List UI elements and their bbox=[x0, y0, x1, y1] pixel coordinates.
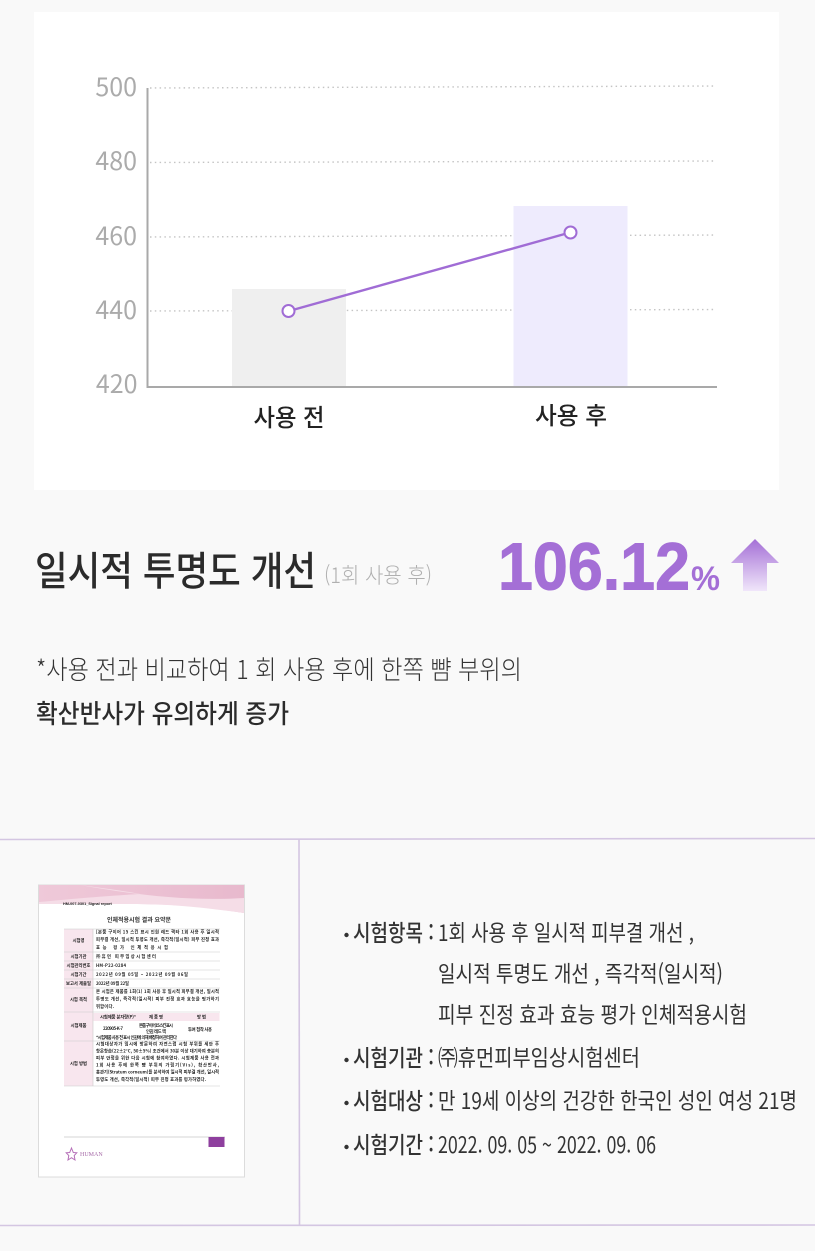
report table: 투명도 개선, 즉각적(일시적) 피부 진정 효과를 평가하였다. bbox=[96, 1076, 207, 1083]
panel: chart background bbox=[34, 12, 779, 490]
test details list bbox=[344, 914, 797, 1160]
item: test items: 시험항목 : bbox=[353, 914, 434, 948]
report table: 효능 평가 인체적용시험 bbox=[96, 944, 168, 951]
y axis labels: 500 bbox=[95, 68, 137, 104]
test report document bbox=[38, 885, 244, 1177]
report table: 피부 안정을 위한 다음 시험에 참여하였다. 시험제품 사용 전과 bbox=[96, 1054, 219, 1062]
report table: HM-P22-0284 bbox=[96, 963, 126, 969]
report table: 시험제품 분자량(P)* bbox=[100, 1014, 136, 1020]
report table: 홍관기(Stratum corneum)를 분석하여 일시적 피부결 개선, 일시적 bbox=[96, 1068, 219, 1076]
report logo: HUMAN bbox=[80, 1152, 103, 1158]
report footer bbox=[64, 1136, 225, 1138]
report table: 2022년 09월 22일 bbox=[96, 980, 129, 987]
description line 2: 확산반사가 유의하게 증가 bbox=[36, 694, 289, 731]
item: test period: 2022. 09. 05 ~ 2022. 09. 06 bbox=[438, 1128, 656, 1160]
report code: HM-007-0301_Signal report bbox=[63, 902, 112, 906]
report title: 인체적용시험 결과 요약문 bbox=[107, 915, 172, 924]
report table: 시험관리번호 bbox=[67, 962, 90, 969]
bar: before use bbox=[232, 289, 346, 387]
report table: 시험기관 bbox=[71, 953, 86, 960]
item: test items bbox=[344, 914, 747, 1030]
item: test subjects: 시험대상 : bbox=[353, 1082, 434, 1116]
report table bbox=[64, 928, 220, 1086]
y axis labels: 480 bbox=[95, 142, 137, 178]
result value: % bbox=[691, 560, 720, 598]
report table: 인원 레드 핵 bbox=[146, 1028, 166, 1035]
report table: *시험제품 사용 전 표시 인원에 의해 배정하여 관리한다 bbox=[96, 1034, 177, 1041]
x label: after use: 사용 후 bbox=[535, 396, 607, 431]
result value: 106.12 bbox=[498, 530, 690, 604]
report table: 위함이다. bbox=[96, 1003, 115, 1010]
axes bbox=[148, 88, 716, 387]
report table: 본품 구이어 15 스킨 표시 bbox=[139, 1022, 173, 1029]
report table: 시험 방법 bbox=[70, 1060, 87, 1067]
trend line with markers bbox=[282, 226, 576, 317]
panel: test info frame bbox=[0, 838, 815, 1226]
grid lines bbox=[150, 86, 716, 311]
report table: [본품 구이어 15 스킨 표시 인원 레드 핵타 1회 사용 후 일시적 bbox=[96, 928, 219, 936]
report table: 항온항습(22±2°C, 50±5%) 조건에서 30분 이상 대기하여 충분히 bbox=[96, 1048, 219, 1054]
y axis labels: 440 bbox=[95, 291, 137, 327]
report table: ㈜휴먼 피부임상시험센터 bbox=[96, 953, 156, 960]
bar and line chart bbox=[95, 68, 716, 433]
bar: after use bbox=[514, 206, 628, 386]
icon: up arrow bbox=[731, 539, 779, 591]
x label: before use: 사용 전 bbox=[254, 398, 324, 433]
item: test institution bbox=[344, 1039, 640, 1073]
y axis labels: 420 bbox=[96, 365, 138, 401]
report table: 시험 목적 bbox=[70, 996, 87, 1003]
report table: 시험대상자가 임시에 방문하여 자연스럽 시험 부위를 세안 후 bbox=[96, 1040, 219, 1048]
report table: 시험제품 bbox=[71, 1022, 86, 1029]
item: test institution: ㈜휴먼피부임상시험센터 bbox=[438, 1041, 640, 1073]
report table: 방법 bbox=[197, 1014, 206, 1020]
item: test items: 1회 사용 후 일시적 피부결 개선 , bbox=[438, 916, 694, 948]
y axis labels: 460 bbox=[95, 217, 137, 253]
item: test period: 시험기간 : bbox=[353, 1126, 434, 1160]
item: test items: 피부 진정 효과 효능 평가 인체적용시험 bbox=[438, 998, 747, 1030]
report table: 제품명 bbox=[149, 1014, 163, 1020]
report table: 투명도 개선, 즉각적(일시적) 피부 진정 효과 효능을 평가하기 bbox=[96, 996, 219, 1002]
report table: 220905-K-7 bbox=[103, 1026, 123, 1032]
report logo bbox=[66, 1148, 103, 1160]
description line 1: *사용 전과 비교하여 1 회 사용 후에 한쪽 뺨 부위의 bbox=[36, 650, 522, 687]
report table: 1회 사용 후에 한쪽 뺨 부위의 가림기(Vis), 확산반사, bbox=[96, 1062, 220, 1068]
report table: 보고서 제출일 bbox=[66, 980, 91, 987]
heading: temporary transparency improvement: 일시적 투명도 개선 bbox=[35, 539, 316, 597]
report header band bbox=[39, 885, 244, 913]
report table: 2022년 09월 05일 ~ 2022년 09월 06일 bbox=[96, 971, 188, 978]
item: test items: 일시적 투명도 개선 , 즉각적(일시적) bbox=[438, 957, 723, 989]
y axis labels bbox=[95, 68, 138, 401]
heading note: (1회 사용 후) bbox=[324, 559, 432, 590]
report table: 시험기간 bbox=[71, 971, 86, 978]
item: test period bbox=[344, 1126, 656, 1160]
item: test institution: 시험기관 : bbox=[353, 1039, 434, 1073]
report table: 피부결 개선, 일시적 투명도 개선, 즉각적(일시적) 피부 진정 효과 bbox=[96, 936, 219, 943]
report table: 시험명 bbox=[73, 937, 84, 944]
report table: 투여 접착 사용 bbox=[188, 1026, 212, 1033]
report table: 본 시험은 제품를 1회(1) 1회 사용 후 일시적 피부결 개선, 일시적 bbox=[96, 988, 219, 995]
